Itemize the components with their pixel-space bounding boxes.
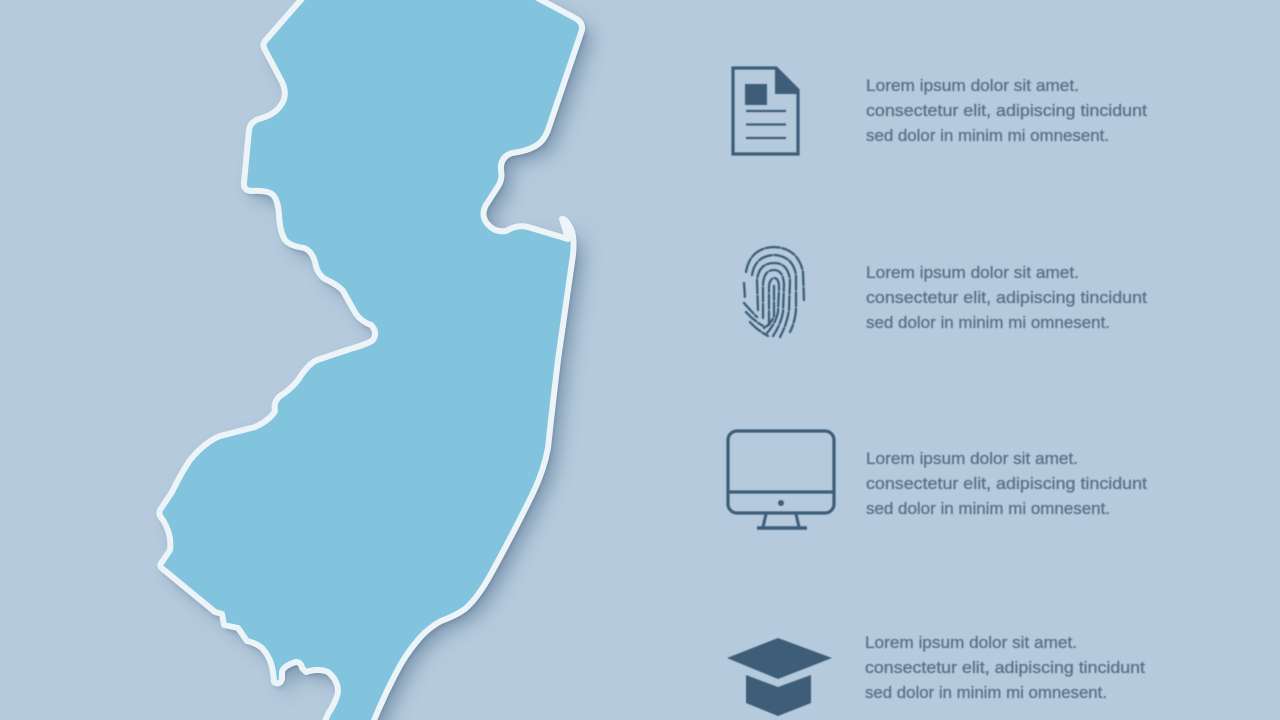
icon: desktop computer (728, 431, 834, 528)
text block 1: Lorem ipsum dolor sit amet. (866, 76, 1079, 95)
text block 2 (866, 263, 1147, 332)
text block 3: consectetur elit, adipiscing tincidunt (866, 474, 1147, 493)
text block 3 (866, 449, 1147, 518)
text block 1: consectetur elit, adipiscing tincidunt (866, 101, 1147, 120)
text block 2: consectetur elit, adipiscing tincidunt (866, 288, 1147, 307)
text block 4 (865, 633, 1145, 702)
text block 3: sed dolor in minim mi omnesent. (866, 499, 1110, 518)
icon: fingerprint (744, 247, 804, 337)
icon: document (733, 67, 799, 154)
text block 3: Lorem ipsum dolor sit amet. (866, 449, 1078, 468)
map: New Jersey outline (159, 0, 592, 720)
text block 4: Lorem ipsum dolor sit amet. (865, 633, 1077, 652)
text block 4: consectetur elit, adipiscing tincidunt (865, 658, 1145, 677)
text block 4: sed dolor in minim mi omnesent. (865, 683, 1107, 702)
text block 2: Lorem ipsum dolor sit amet. (866, 263, 1079, 282)
text block 1: sed dolor in minim mi omnesent. (866, 126, 1109, 145)
text block 2: sed dolor in minim mi omnesent. (866, 313, 1110, 332)
icon: graduation cap (727, 638, 832, 716)
text block 1 (866, 76, 1147, 145)
